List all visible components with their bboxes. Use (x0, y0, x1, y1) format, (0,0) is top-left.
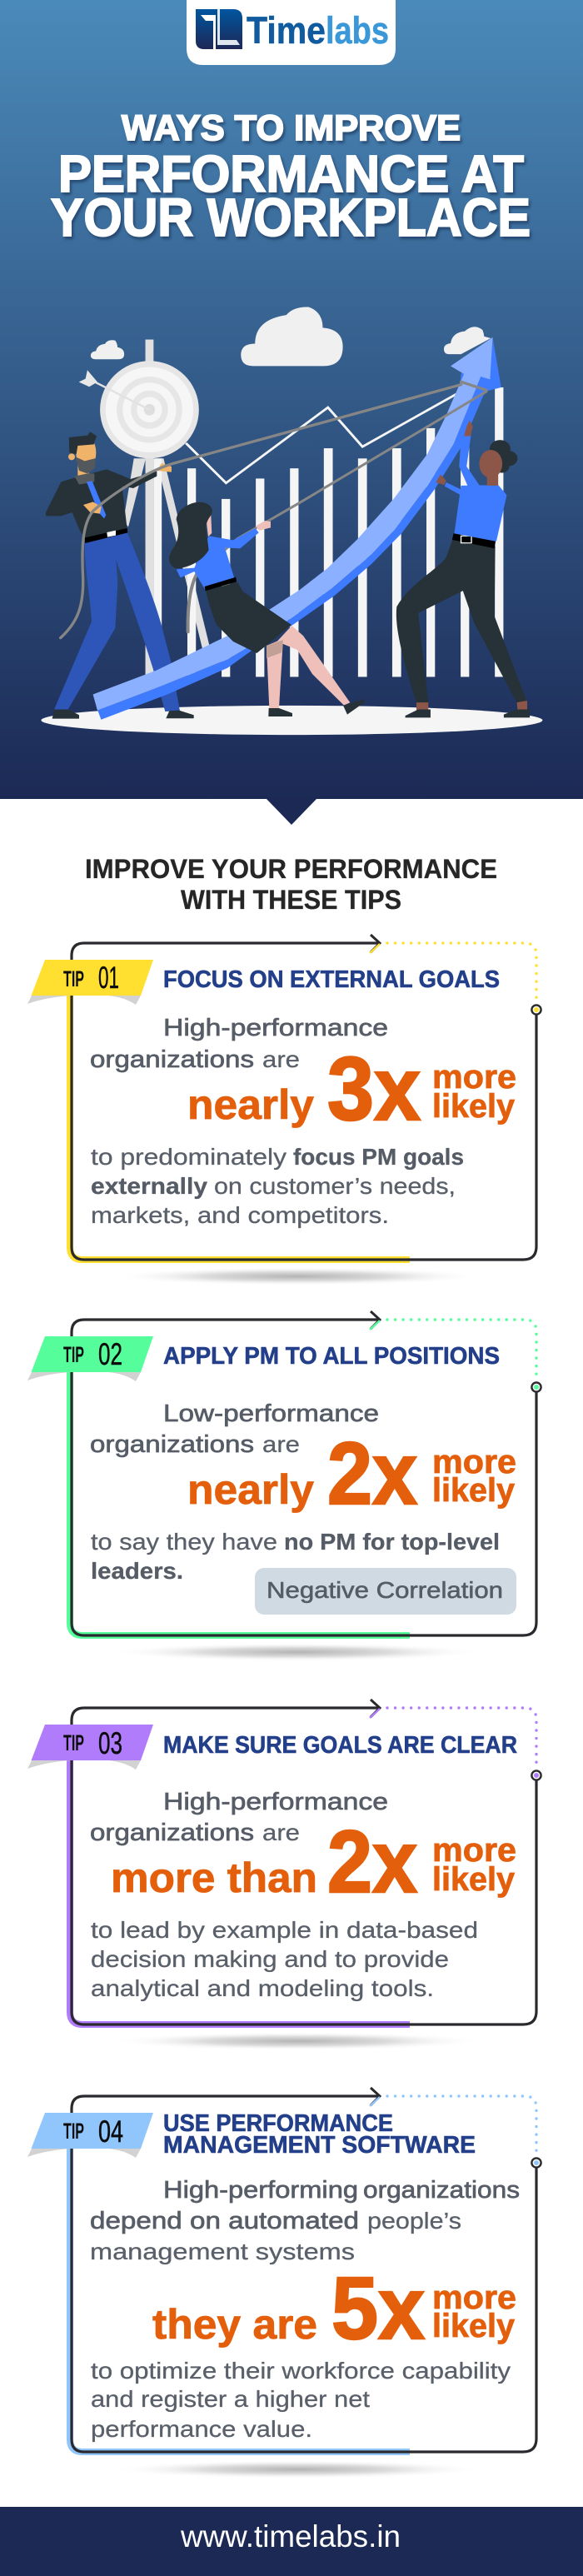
woman in skirt (169, 502, 365, 716)
growth arrow (93, 337, 501, 720)
hero background (0, 0, 583, 825)
bar chart (187, 387, 503, 676)
intro text: depend on automated (90, 2208, 359, 2234)
detail text: to lead by example in data-based (91, 1917, 478, 1943)
intro text (90, 1015, 388, 1073)
tip banner (27, 1725, 153, 1770)
detail text: to optimize their workforce capability (91, 2358, 511, 2384)
intro text (90, 1400, 379, 1458)
stat (187, 1425, 516, 1523)
panel: tip 01 (27, 935, 541, 1286)
intro text (90, 1789, 388, 1846)
intro text: organizations (90, 1431, 254, 1458)
tip banner (27, 2113, 153, 2158)
stat: likely (432, 1472, 516, 1509)
logo: Timelabs: Time (247, 9, 326, 52)
stat: they are (152, 2301, 317, 2348)
man in blue shirt (396, 420, 530, 717)
tip heading: USE PERFORMANCE (163, 2110, 393, 2137)
intro text: are (262, 1046, 300, 1072)
tip banner: TIP (63, 1342, 84, 1367)
title: WAYS TO IMPROVE (122, 108, 461, 148)
detail text: and register a higher net (91, 2386, 370, 2412)
intro text: people’s (367, 2208, 461, 2234)
stat: nearly (187, 1081, 314, 1128)
illustration: team pulling growth arrow (41, 307, 542, 735)
detail text (91, 1144, 464, 1228)
footer: www.timelabs.in (180, 2519, 401, 2554)
card shadow (110, 1267, 485, 1286)
stat: more than (111, 1855, 317, 1901)
ropes (61, 382, 486, 638)
footer (0, 2507, 583, 2576)
card frame (70, 1700, 541, 2024)
detail text: to predominately (91, 1144, 287, 1170)
callout: negative correlation: Negative Correlation (267, 1577, 503, 1603)
target on stand (79, 340, 210, 676)
logo: Timelabs (187, 0, 396, 65)
callout: negative correlation (255, 1568, 516, 1615)
intro text: are (262, 1431, 300, 1457)
stat: 2x (327, 1813, 417, 1911)
intro text: organizations (363, 2177, 520, 2204)
stat: more (432, 1059, 516, 1096)
detail text: no PM for top-level (284, 1529, 500, 1555)
card frame (70, 2088, 541, 2452)
panel: tip 04 (27, 2088, 541, 2479)
stat: more (432, 1832, 516, 1869)
intro text: High-performing (163, 2177, 358, 2204)
tip banner: 03 (98, 1726, 122, 1760)
tip banner: 02 (98, 1337, 122, 1371)
intro text: management systems (90, 2239, 355, 2264)
stat: 5x (331, 2259, 425, 2358)
intro text: High-performance (163, 1789, 388, 1815)
tip banner: 04 (98, 2114, 123, 2149)
detail text (91, 1529, 500, 1584)
tip heading: MANAGEMENT SOFTWARE (163, 2132, 476, 2159)
title (51, 108, 531, 247)
stat: likely (432, 1088, 516, 1125)
detail text (91, 2358, 511, 2442)
detail text: focus PM goals (293, 1144, 464, 1170)
title: PERFORMANCE AT (58, 146, 524, 203)
panel: tip 02 (27, 1311, 541, 1661)
tip banner: TIP (63, 1730, 84, 1755)
title: YOUR WORKPLACE (51, 187, 531, 247)
card frame (70, 935, 541, 1260)
stat: 2x (327, 1425, 417, 1523)
stat: more (432, 1444, 516, 1480)
tip banner (27, 960, 153, 1005)
card shadow (110, 2460, 485, 2479)
detail text: to say they have (91, 1529, 277, 1555)
detail text: performance value. (91, 2416, 312, 2442)
card shadow (110, 1643, 485, 1661)
detail text: decision making and to provide (91, 1946, 449, 1972)
stat: nearly (187, 1466, 314, 1513)
intro text: Low-performance (163, 1400, 379, 1427)
intro text: organizations (90, 1820, 254, 1846)
stat: likely (432, 1861, 516, 1898)
tip banner: TIP (63, 966, 84, 991)
tip heading: FOCUS ON EXTERNAL GOALS (163, 966, 500, 993)
detail text: on customer’s needs, (214, 1173, 456, 1199)
stat: 3x (327, 1038, 421, 1139)
detail text (91, 1917, 478, 2001)
stat: likely (432, 2308, 516, 2344)
tip heading: MAKE SURE GOALS ARE CLEAR (163, 1732, 517, 1759)
tip banner: 01 (98, 961, 119, 995)
panel: tip 03 (27, 1700, 541, 2050)
section heading (85, 854, 497, 915)
intro text (90, 2177, 520, 2264)
stat (111, 1813, 516, 1911)
line chart (186, 392, 459, 483)
logo: Timelabs: labs (326, 9, 389, 52)
detail text: leaders. (91, 1558, 183, 1584)
detail text: markets, and competitors. (91, 1202, 389, 1228)
tip banner (27, 1336, 153, 1381)
tip heading: APPLY PM TO ALL POSITIONS (163, 1343, 500, 1370)
detail text: analytical and modeling tools. (91, 1975, 434, 2001)
man with tie (46, 432, 194, 719)
tip banner: TIP (63, 2119, 84, 2144)
stat (187, 1038, 516, 1139)
intro text: High-performance (163, 1015, 388, 1041)
intro text: are (262, 1820, 300, 1845)
detail text: externally (91, 1173, 207, 1199)
card shadow (110, 2032, 485, 2050)
card frame (70, 1311, 541, 1635)
section heading: WITH THESE TIPS (181, 885, 401, 915)
tip heading (163, 2110, 476, 2159)
intro text: organizations (90, 1046, 254, 1073)
stat (152, 2259, 516, 2358)
clouds (91, 307, 491, 366)
stat: more (432, 2279, 516, 2316)
section heading: IMPROVE YOUR PERFORMANCE (85, 854, 497, 884)
ground ellipse (41, 706, 542, 735)
